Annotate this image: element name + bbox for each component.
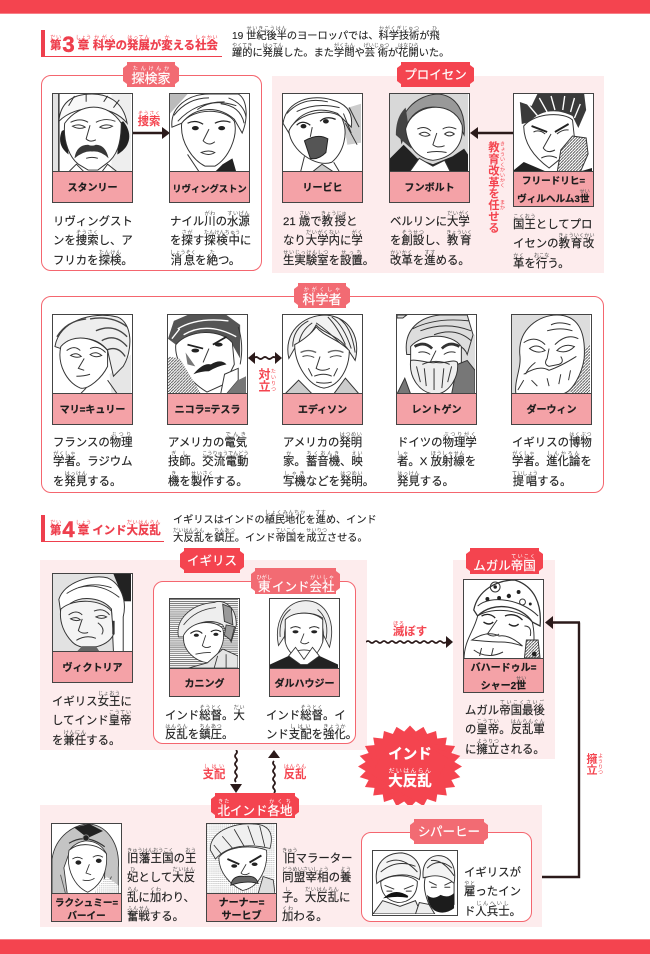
- panel label: explorers: [123, 62, 179, 87]
- portrait: Friedrich Wilhelm III: [513, 93, 594, 207]
- text: Dalhousie: インド総督そうとく 。イ: [266, 704, 346, 722]
- name: Dalhousie: [270, 668, 339, 696]
- panel: Prussia: [272, 76, 604, 273]
- text: Stanley: リヴィングスト: [53, 216, 133, 228]
- label: rule: 支配しはい: [203, 764, 225, 781]
- text: Sepoy: イギリスが: [464, 866, 521, 878]
- arrow: destroy: [366, 636, 453, 648]
- name: Lakshmibai: バーイー: [67, 910, 106, 922]
- panel label: Britain: [180, 548, 244, 573]
- panel label: Mughal Empire: 帝国ていこく: [511, 554, 536, 572]
- panel label: Mughal Empire: ムガル: [473, 558, 511, 572]
- panel label: scientists: 科学者かがくしゃ: [302, 287, 342, 307]
- arrow: education reform: [470, 127, 513, 139]
- text: Edison: アメリカの発明はつめい: [283, 432, 362, 448]
- text: Victoria: を兼任けんにん する。: [52, 730, 120, 747]
- starburst: Indian Rebellion: [358, 726, 462, 805]
- text: Bahadur Shah II: に擁立ようりつ される。: [465, 739, 545, 756]
- name: Bahadur Shah II: シャー2世せい: [481, 676, 526, 692]
- portrait: Marie Curie: [52, 314, 133, 425]
- starburst text: インド: [388, 747, 432, 763]
- text: Roentgen: [397, 432, 477, 488]
- panel label: East India Company: [251, 568, 340, 594]
- name: Roentgen: [397, 393, 476, 424]
- panel: East India Company: [153, 581, 356, 744]
- text: Nana Sahib: 子し 。大反乱だいはんらん に: [282, 887, 350, 904]
- name: Nana Sahib: ナーナー=: [219, 898, 264, 908]
- text: Sepoy: ド人兵士じんへいし 。: [464, 901, 521, 918]
- portrait: Nana Sahib: [206, 823, 277, 922]
- name: Nikola Tesla: [168, 393, 247, 424]
- intro text: chapter 4: [173, 510, 377, 544]
- text: Humboldt: を創設そうせつ し、教育きょういく: [390, 230, 472, 247]
- name: Friedrich Wilhelm III: [514, 171, 593, 206]
- panel label: North India: [211, 793, 299, 818]
- text: Bahadur Shah II: ムガル帝国最後ていこくさいご: [465, 700, 545, 716]
- name: Friedrich Wilhelm III: ヴィルヘルム3世せい: [517, 189, 590, 205]
- portrait: Victoria: [52, 573, 133, 683]
- label: education reform: 教育改革きょういくかいかく を 任まか せる: [487, 141, 505, 233]
- portrait: Roentgen: [396, 314, 477, 425]
- name: Lakshmibai: ラクシュミー=: [55, 898, 118, 908]
- name: Dalhousie: ダルハウジー: [274, 678, 334, 690]
- text: Marie Curie: [53, 432, 133, 488]
- label: destroy: 滅ほろ ぼす: [393, 621, 427, 638]
- text: Stanley: [53, 215, 133, 267]
- text: Victoria: してインド皇帝こうてい: [52, 710, 131, 727]
- portrait: Livingstone: [169, 93, 250, 203]
- text: Roentgen: 者しゃ 。X 放射線ほうしゃせん を: [397, 451, 476, 468]
- top bar: [0, 0, 650, 14]
- intro text: chapter 3: 躍的やくてき に発展はってん した。また学問がくもん や芸術げいじゅつ が花開はなひら いた。: [232, 43, 449, 59]
- text: Liebig: [283, 210, 374, 267]
- name: Roentgen: レントゲン: [412, 405, 462, 416]
- panel: Mughal Empire: [453, 560, 555, 759]
- name: Friedrich Wilhelm III: フリードリヒ=: [522, 176, 585, 187]
- illustration: Sepoys: [372, 850, 458, 916]
- name: Victoria: ヴィクトリア: [62, 663, 122, 674]
- panel label: Sepoy: [410, 819, 488, 844]
- starburst text: [388, 746, 432, 790]
- panel label: East India Company: 会社がいしゃ: [310, 574, 335, 594]
- text: Friedrich Wilhelm III: [513, 214, 595, 270]
- text: Stanley: ンを捜索そうさく し、ア: [53, 230, 133, 247]
- text: Bahadur Shah II: の皇帝こうてい 。反乱軍はんらんぐん: [465, 719, 545, 736]
- name: Humboldt: フンボルト: [404, 183, 455, 194]
- text: Stanley: フリカを探検たんけん 。: [53, 250, 133, 267]
- text: Sepoy: 雇やと ったイン: [464, 881, 521, 898]
- starburst text: 大反乱だいはんらん: [388, 769, 432, 790]
- chapter 4 title text: 第だい4章しょう インド大反乱だいはんらん: [50, 517, 161, 542]
- name: Livingstone: リヴィングストン: [172, 184, 247, 194]
- name: Humboldt: [390, 171, 469, 202]
- heading: chapter 3: [41, 30, 222, 57]
- text: Livingstone: [170, 210, 251, 267]
- text: Victoria: イギリス女王じょおう に: [52, 690, 132, 708]
- name: Livingstone: [170, 171, 249, 202]
- text: Edison: 家か 。蓄音機ちくおんき 、映えい: [283, 451, 363, 468]
- intro text: chapter 3: [232, 26, 449, 59]
- portrait: Liebig: [282, 93, 363, 203]
- panel label: North India: 北きた: [217, 799, 230, 818]
- panel label: East India Company: インド: [272, 580, 310, 594]
- intro text: chapter 4: 大反乱だいはんらん を鎮圧ちんあつ 。インド帝国ていこく を成立せいりつ させる。: [173, 528, 368, 544]
- panel label: scientists: [294, 283, 350, 308]
- text: Liebig: なり大学内だいがくない に学がく: [283, 230, 363, 247]
- arrow: sepoy to Mughal support line: [542, 616, 580, 878]
- text: Sepoy: [464, 866, 521, 918]
- portrait: Bahadur Shah II: [463, 579, 544, 693]
- name: Nikola Tesla: ニコラ=テスラ: [175, 405, 240, 416]
- portrait: Edison: [282, 314, 363, 425]
- label: opposition: 対立たいりつ: [257, 368, 276, 392]
- text: Liebig: 21 歳さい で教授きょうじゅ と: [283, 210, 357, 228]
- portrait: Canning: [169, 598, 240, 697]
- name: Darwin: [512, 393, 591, 424]
- text: Lakshmibai: 旧藩王国きゅうはんおうこく の王おう: [127, 848, 196, 864]
- heading: chapter 4: [41, 515, 164, 542]
- text: Nana Sahib: 加くわ わる。: [282, 906, 328, 923]
- name: Liebig: リービヒ: [302, 183, 342, 194]
- text: Nikola Tesla: 技師ぎし 。交流電動こうりゅうでんどう: [168, 451, 249, 468]
- text: Nana Sahib: 旧きゅう マラーター: [282, 848, 353, 864]
- label: rebellion: 反乱はんらん: [284, 764, 306, 781]
- name: Darwin: ダーウィン: [526, 405, 576, 416]
- panel label: Prussia: [397, 62, 474, 87]
- name: Liebig: [283, 171, 362, 202]
- portrait: Stanley: [52, 93, 133, 203]
- panel label: Sepoy: シパーヒー: [418, 824, 480, 838]
- text: Livingstone: ナイル川がわ の水源すいげん: [170, 210, 250, 228]
- portrait: Dalhousie: [269, 598, 340, 697]
- name: Nana Sahib: [207, 893, 276, 921]
- text: Canning: インド総督そうとく 。大だい: [165, 704, 245, 722]
- text: Friedrich Wilhelm III: イセンの教育改きょういくかい: [513, 233, 595, 250]
- text: Canning: 反乱はんらん を鎮圧ちんあつ 。: [165, 724, 233, 741]
- panel label: North India: 各地かくち: [268, 799, 293, 818]
- arrow: rule: [230, 750, 242, 793]
- text: Dalhousie: [266, 704, 357, 741]
- name: Marie Curie: マリ=キュリー: [60, 405, 125, 416]
- text: Marie Curie: 学者がくしゃ 。ラジウム: [53, 451, 133, 468]
- text: Marie Curie: フランスの物理ぶつり: [53, 432, 133, 448]
- text: Roentgen: ドイツの物理学ぶつりがく: [397, 432, 477, 448]
- name: Marie Curie: [53, 393, 132, 424]
- text: Livingstone: を探さが す探検中たんけんちゅう に: [170, 230, 251, 247]
- text: Lakshmibai: 乱らん に加くわ わり、: [127, 887, 195, 904]
- text: Edison: [283, 432, 374, 488]
- panel: North India: [40, 805, 542, 927]
- text: Nikola Tesla: [168, 432, 249, 488]
- arrow: search: [133, 127, 169, 139]
- text: Liebig: 生実験室せいじっけんしつ を設置せっち 。: [283, 250, 374, 267]
- name: Victoria: [53, 651, 132, 682]
- panel label: explorers: 探検家たんけんか: [131, 66, 170, 86]
- text: Edison: 写機しゃき などを発明はつめい 。: [283, 471, 374, 488]
- name: Stanley: スタンリー: [68, 183, 118, 194]
- panel: Britain: [40, 560, 367, 750]
- panel label: East India Company: 東ひがし: [256, 574, 272, 594]
- portrait: Nikola Tesla: [167, 314, 248, 425]
- name: Nana Sahib: サーヒブ: [222, 910, 262, 922]
- text: Victoria: [52, 690, 132, 747]
- text: Darwin: イギリスの博物はくぶつ: [512, 432, 592, 448]
- name: Edison: エディソン: [298, 405, 347, 416]
- name: Bahadur Shah II: バハードゥル=: [471, 662, 536, 674]
- label: search: 捜索そうさく: [138, 111, 160, 128]
- text: Roentgen: 発見はっけん する。: [397, 471, 454, 488]
- arrow: opposition: [248, 352, 282, 364]
- text: Livingstone: 消息しょうそく を絶た つ。: [170, 250, 240, 267]
- name: Canning: カニング: [184, 678, 224, 690]
- text: Friedrich Wilhelm III: 国王こくおう としてプロ: [513, 214, 592, 230]
- text: Humboldt: [390, 210, 472, 267]
- panel label: Prussia: プロイセン: [404, 68, 467, 82]
- text: Friedrich Wilhelm III: 革かく を行おこな う。: [513, 253, 569, 270]
- text: Darwin: 提唱ていしょう する。: [512, 471, 571, 488]
- label: installed: 擁立ようりつ: [585, 753, 603, 775]
- panel label: Britain: イギリス: [187, 554, 237, 568]
- name: Lakshmibai: [52, 893, 121, 921]
- portrait: Lakshmibai: [51, 823, 122, 922]
- text: Nana Sahib: 同盟宰相どうめいさいしょう の養よう: [282, 867, 351, 884]
- text: Humboldt: 改革かいかく を進すす める。: [390, 250, 470, 267]
- intro text: chapter 3: 19 世紀後半せいきこうはん のヨーロッパでは、科学技術かがくぎじゅつ が飛ひ: [232, 26, 440, 42]
- name: Stanley: [53, 171, 132, 202]
- text: Lakshmibai: 妃ひ として大反だいはん: [127, 867, 195, 884]
- panel label: Mughal Empire: [466, 548, 543, 574]
- text: Lakshmibai: 奮戦ふんせん する。: [127, 906, 184, 923]
- text: Nikola Tesla: 機き を製作せいさく する。: [168, 471, 248, 488]
- panel: scientists: [41, 296, 604, 493]
- text: Bahadur Shah II: [465, 700, 545, 756]
- text: Dalhousie: ンド支配しはい を強化きょうか 。: [266, 724, 357, 741]
- text: Darwin: 学者がくしゃ 。進化論しんかろん を: [512, 451, 592, 468]
- panel: Sepoy: [361, 832, 532, 922]
- panel: explorers: [41, 75, 262, 271]
- portrait: Darwin: [511, 314, 592, 425]
- text: Marie Curie: を発見はっけん する。: [53, 471, 121, 488]
- name: Bahadur Shah II: [464, 658, 543, 692]
- text: Nikola Tesla: アメリカの電気でんき: [168, 432, 247, 448]
- chapter 3 title text: 第だい3章しょう 科学かがく の発展はってん が変か える社会しゃかい: [50, 32, 218, 57]
- text: Humboldt: ベルリンに大学だいがく: [390, 210, 470, 228]
- portrait: Humboldt: [389, 93, 470, 203]
- arrow: rebellion: [268, 750, 280, 793]
- text: Nana Sahib: [282, 848, 353, 923]
- name: Canning: [170, 668, 239, 696]
- name: Edison: [283, 393, 362, 424]
- text: Lakshmibai: [127, 848, 196, 923]
- text: Darwin: [512, 432, 592, 488]
- bottom bar: [0, 939, 650, 954]
- intro text: chapter 4: イギリスはインドの植民地化しょくみんちか を進すす め、インド: [173, 510, 377, 526]
- text: Canning: [165, 704, 245, 741]
- panel label: North India: インド: [230, 804, 268, 818]
